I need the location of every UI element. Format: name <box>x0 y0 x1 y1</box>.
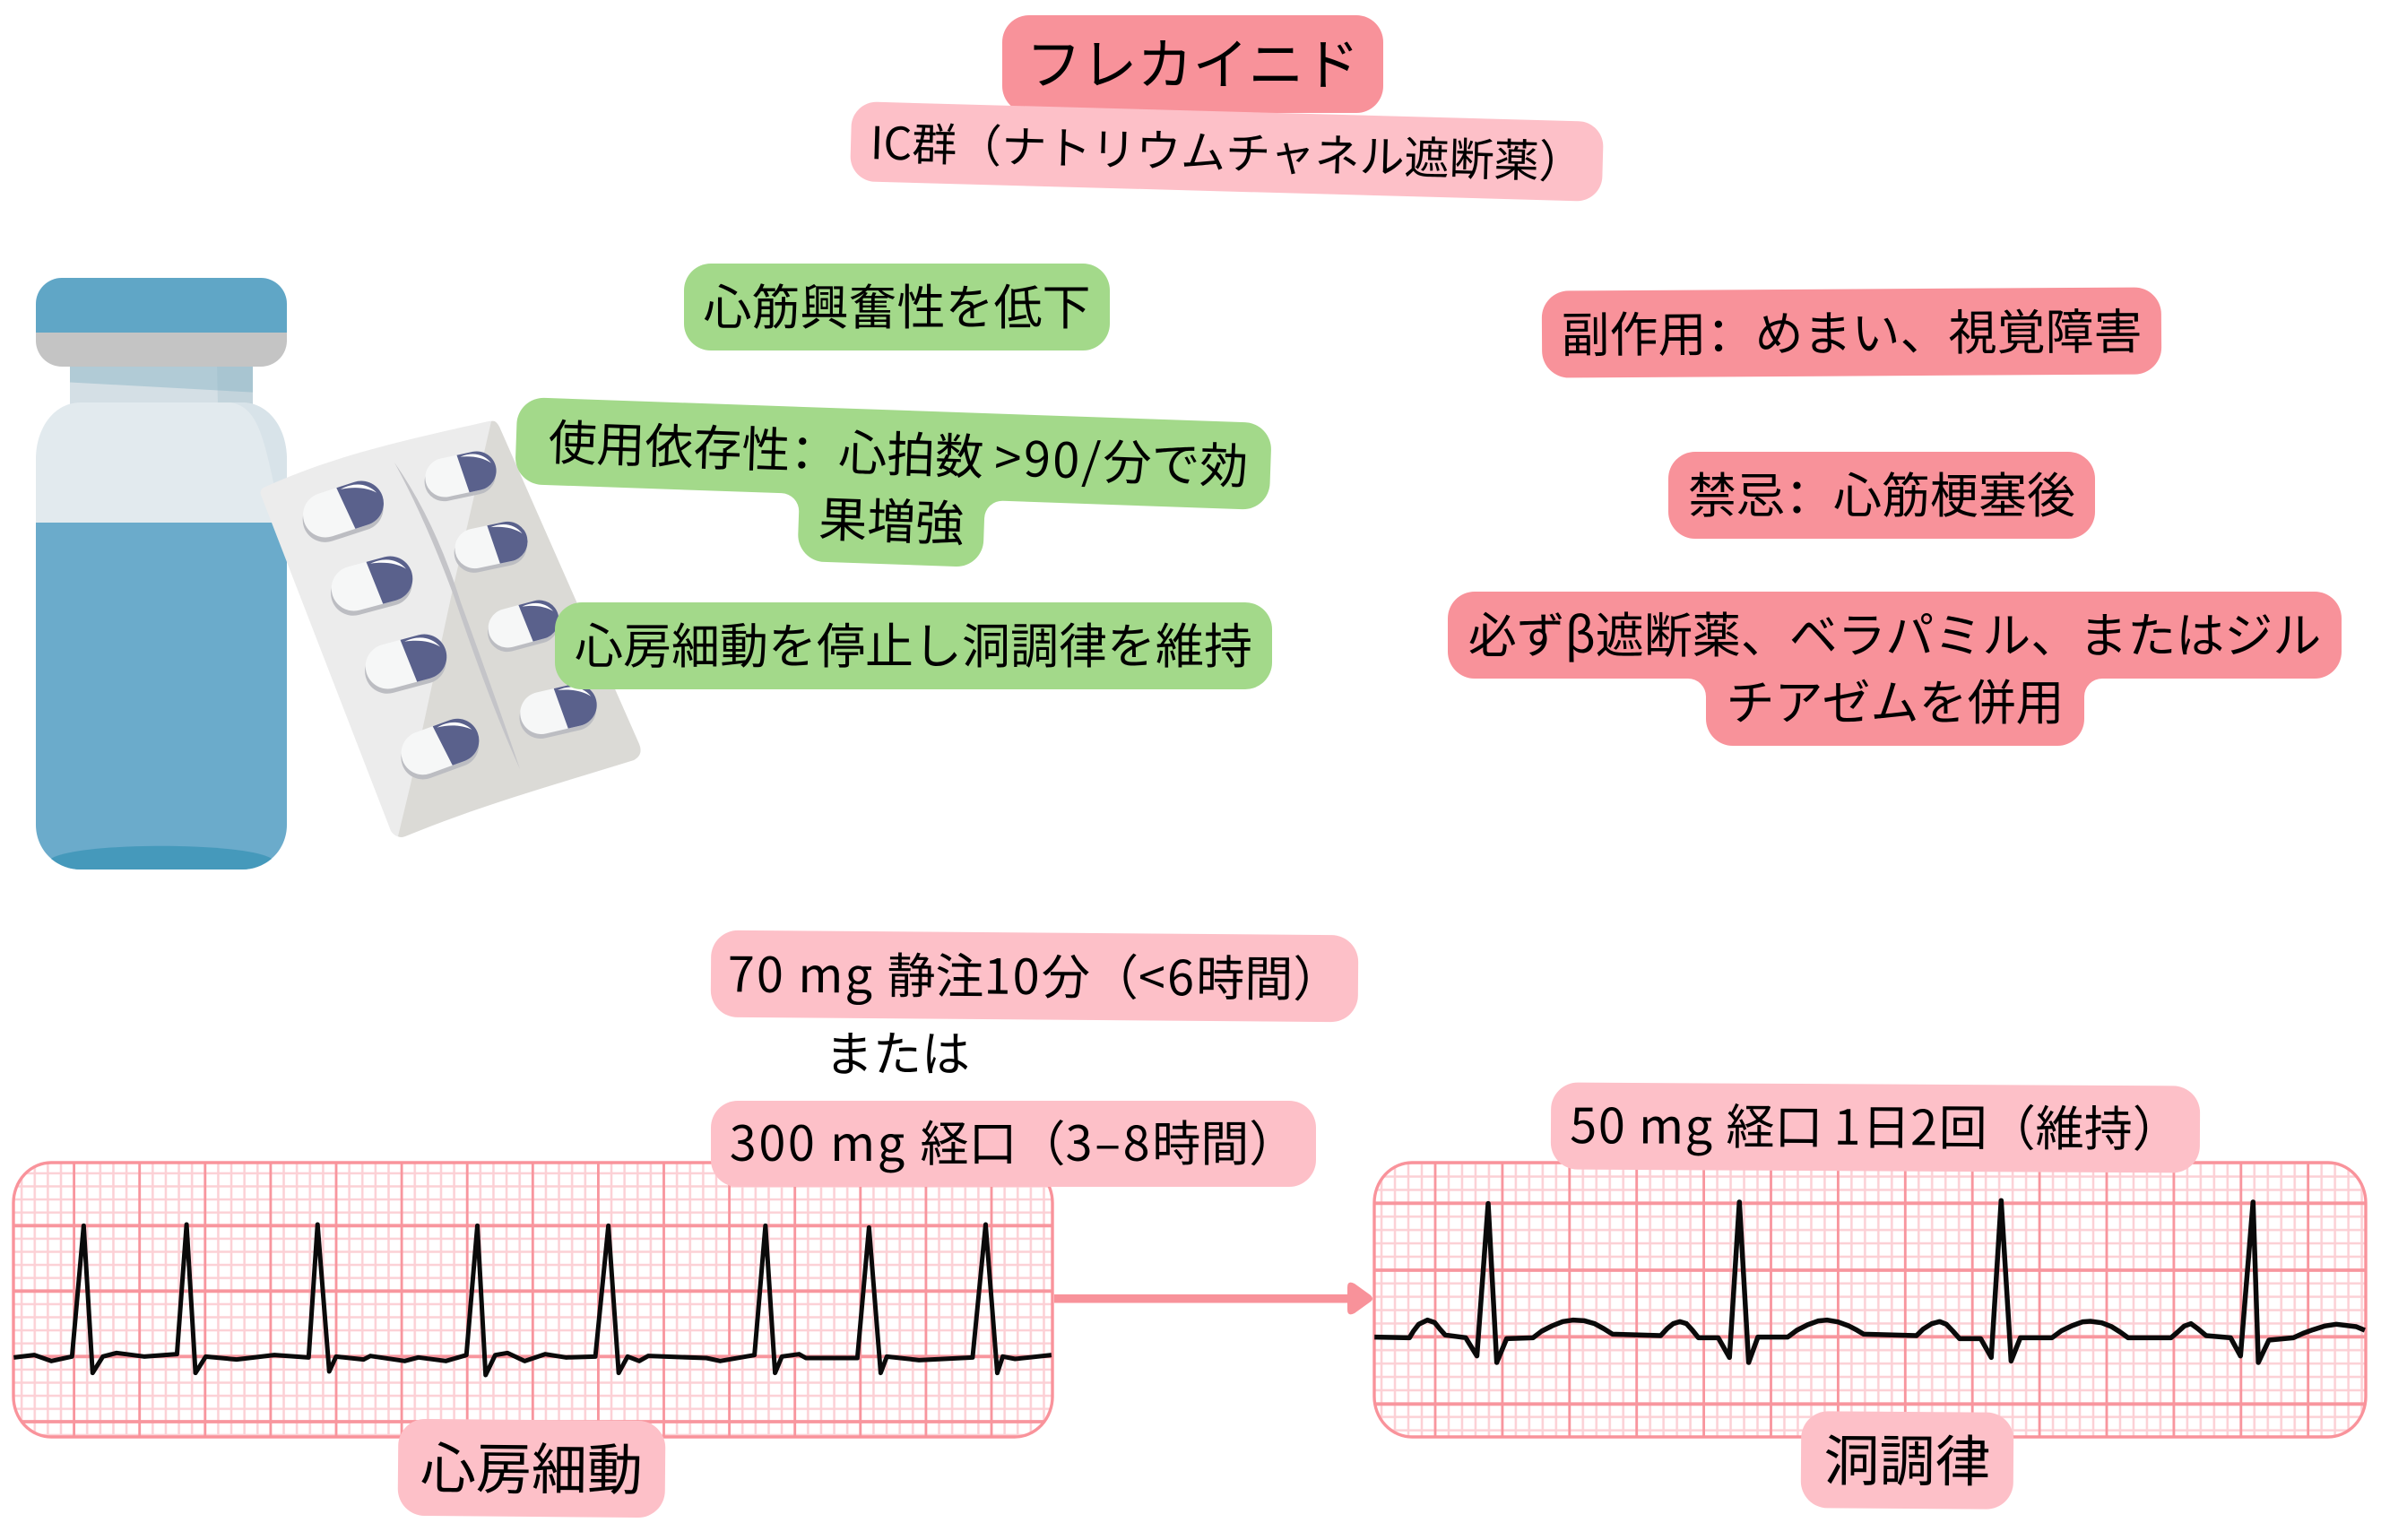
mechanism: stops AF and maintains sinus rhythm: 心房細動を停止し洞調律を維持 <box>575 607 1252 678</box>
vial neck <box>70 363 253 404</box>
caution: required combination therapy: 必ずβ遮断薬、ベラパミル、またはジル <box>1468 596 2321 667</box>
ECG trace: irregular rhythm <box>13 1224 1052 1375</box>
dose: IV loading: 70 mg 静注10分（<6時間） <box>727 935 1342 1011</box>
title: フレカイニド <box>1026 20 1360 100</box>
grid paper <box>1374 1163 2366 1437</box>
label: atrial fibrillation <box>398 1419 665 1518</box>
mechanism: reduces excitability: 心筋興奮性を低下 <box>703 268 1090 339</box>
subtitle: drug class: IC群（ナトリウムチャネル遮断薬） <box>870 108 1585 192</box>
vial liquid <box>36 523 287 869</box>
vial right shading <box>230 402 287 538</box>
dose: oral loading: 300 mg 経口（3–8時間） <box>730 1104 1297 1175</box>
capsule 6 <box>450 518 532 576</box>
label: atrial fibrillation: 心房細動 <box>420 1423 643 1506</box>
capsule 5 <box>420 447 501 505</box>
capsule 4 <box>394 713 487 785</box>
capsule 2 <box>325 551 419 620</box>
mechanism: use dependence: 果増強 <box>818 480 965 556</box>
caution: contraindication: 禁忌：心筋梗塞後 <box>1688 456 2075 527</box>
caution: required combination therapy <box>1448 592 2342 746</box>
dose: maintenance: 50 mg 経口 1日2回（維持） <box>1570 1086 2181 1161</box>
label: sinus rhythm <box>1801 1411 2013 1510</box>
capsule 7 <box>482 596 564 656</box>
illustration: blister pack of capsules <box>261 421 641 837</box>
blister foil light side <box>261 421 641 837</box>
vial bottom shadow <box>51 846 272 869</box>
capsule 8 <box>515 679 602 743</box>
illustration: medicine vial <box>36 278 287 869</box>
label: sinus rhythm: 洞調律 <box>1823 1415 1991 1498</box>
caution: adverse effects: 副作用：めまい、視覚障害 <box>1561 292 2143 367</box>
blister divider <box>394 463 520 769</box>
capsule 3 <box>359 629 453 698</box>
caution: required combination therapy: チアゼムを併用 <box>1727 663 2064 734</box>
ECG strip: sinus rhythm <box>1374 1163 2366 1437</box>
mechanism: use dependence <box>512 397 1272 577</box>
vial glass body <box>36 402 287 538</box>
mechanism: use dependence: 使用依存性：心拍数 >90/分で効 <box>547 403 1250 498</box>
ECG trace: regular rhythm <box>1374 1200 2365 1363</box>
vial cap <box>36 278 287 367</box>
text: or: または <box>825 1015 970 1086</box>
capsule 1 <box>296 475 391 548</box>
blister foil dark side <box>398 421 641 837</box>
ECG strip: atrial fibrillation <box>13 1163 1052 1437</box>
grid paper <box>13 1163 1052 1437</box>
arrow: atrial fibrillation to sinus rhythm <box>1054 1283 1372 1314</box>
